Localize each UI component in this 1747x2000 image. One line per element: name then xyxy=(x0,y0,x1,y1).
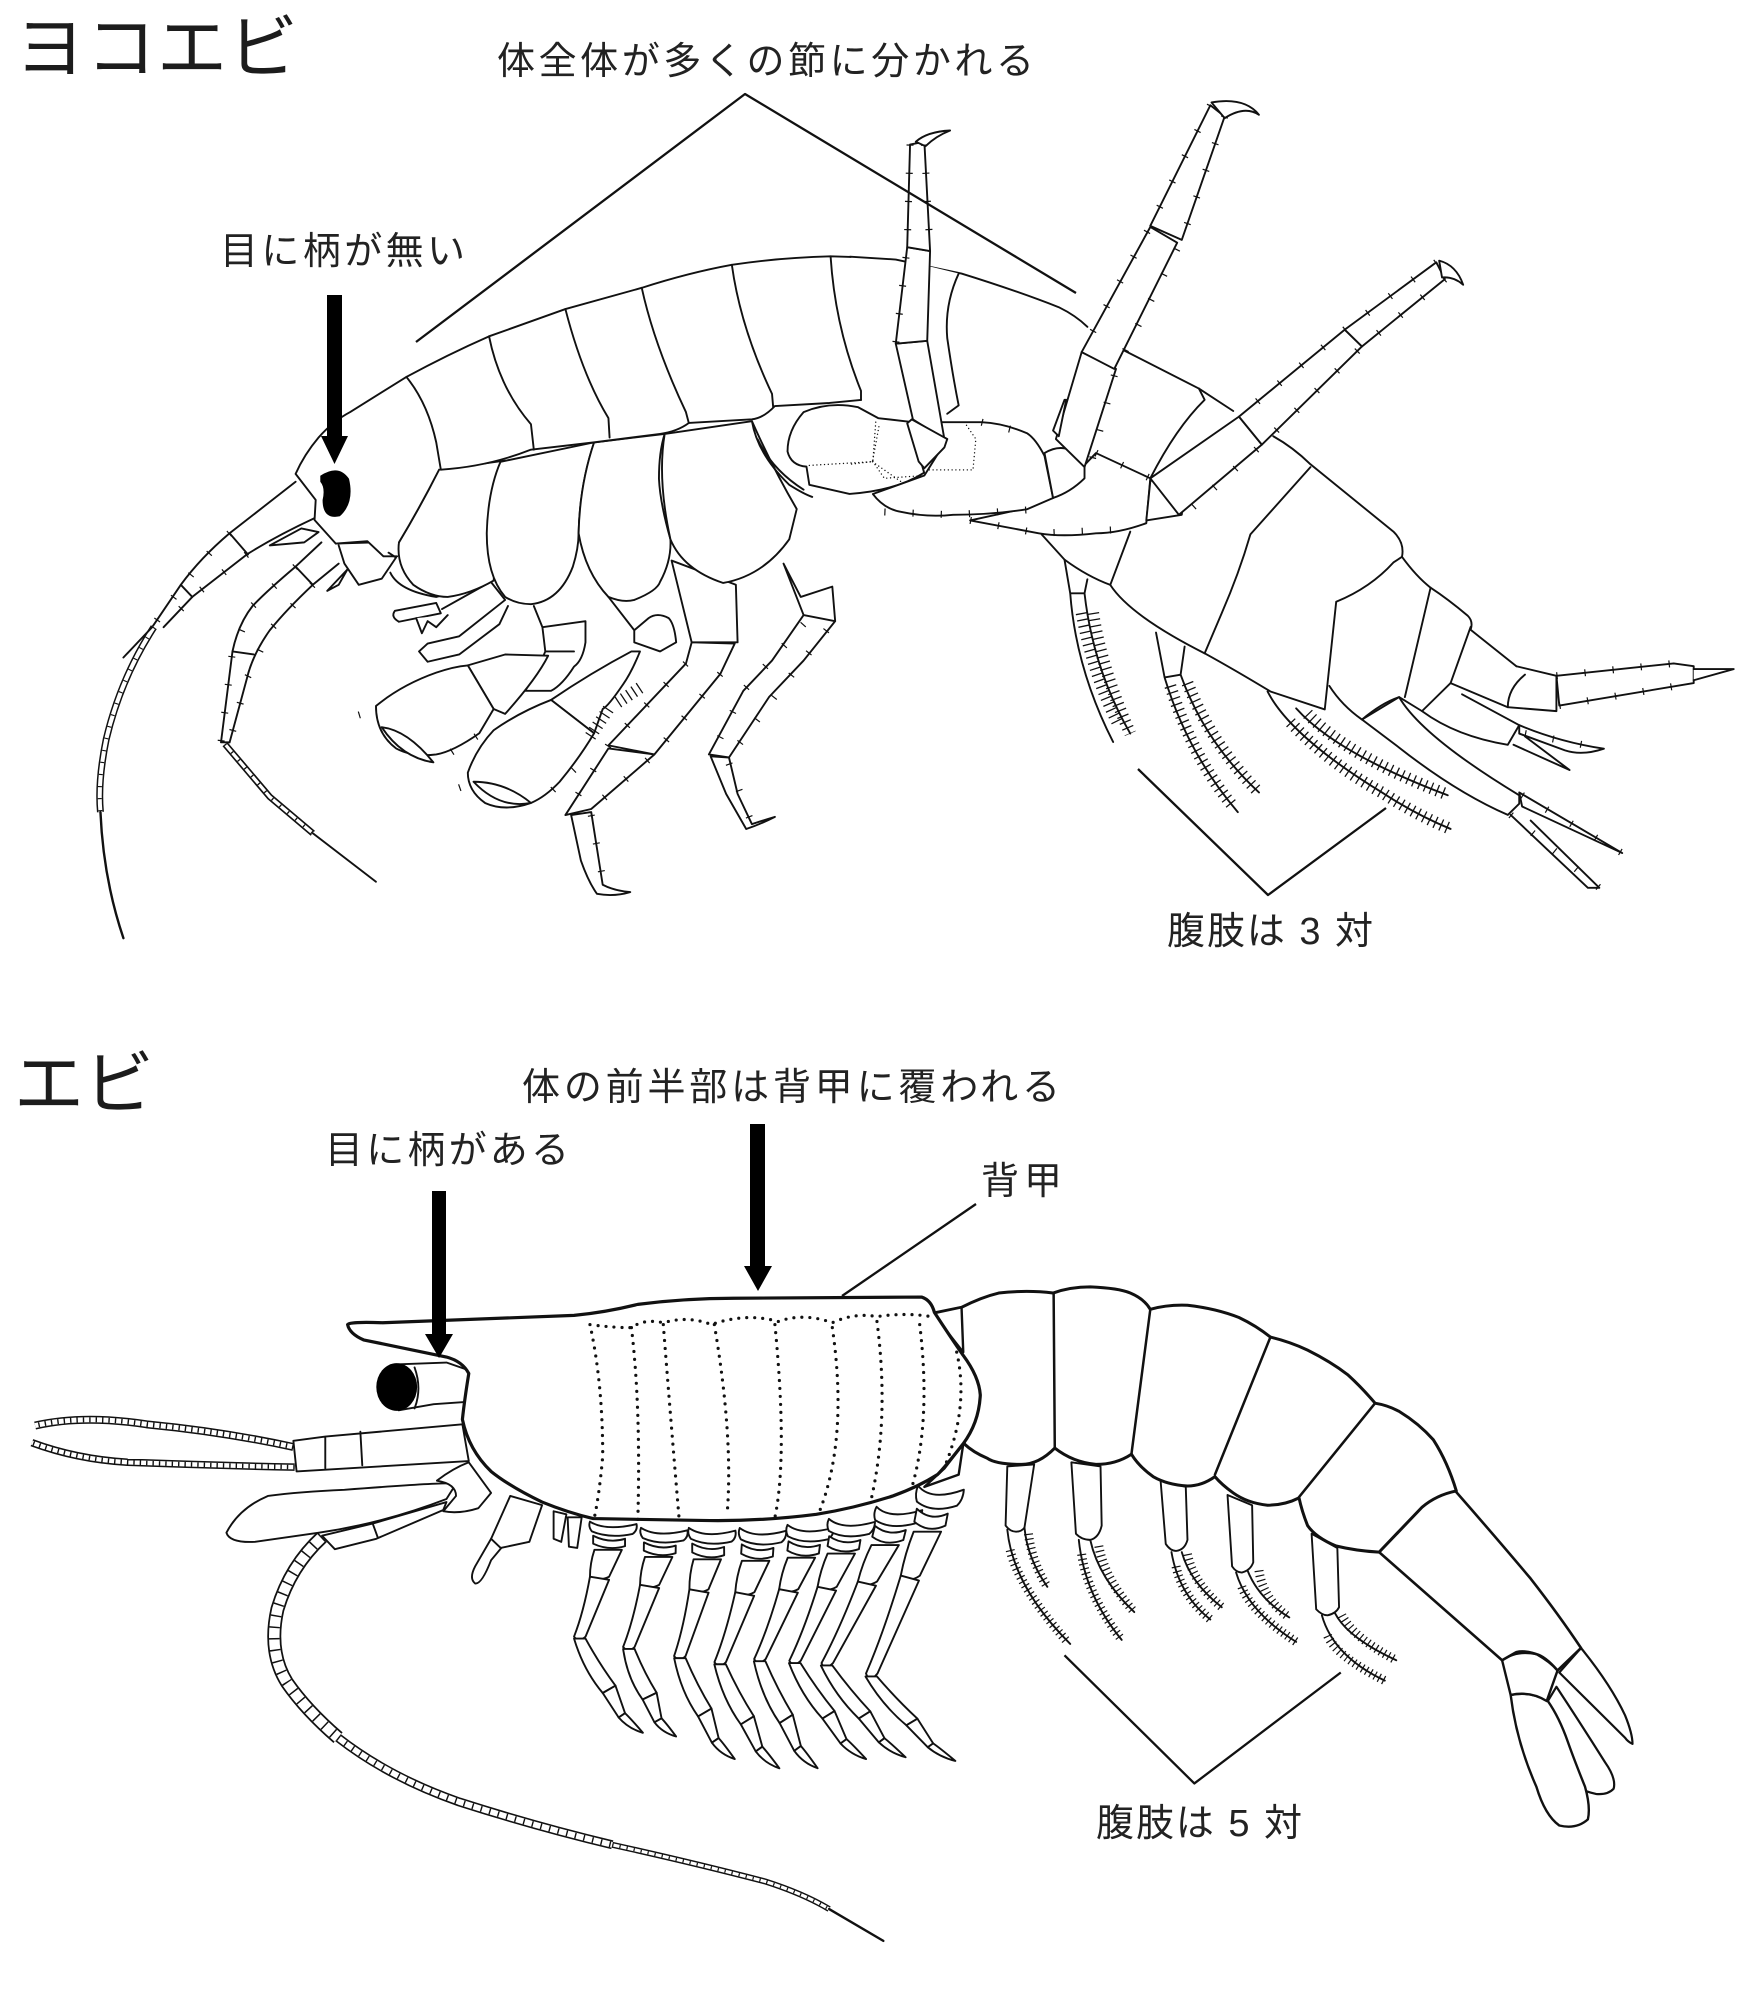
eye: black, no stalk xyxy=(320,470,351,517)
abdomen segments xyxy=(924,1287,1456,1552)
leader: carapace xyxy=(842,1204,976,1296)
title: amphipod: ヨコエビ xyxy=(15,9,298,87)
long antenna flagellum xyxy=(274,1537,883,1941)
arrow: carapace xyxy=(744,1124,772,1291)
internal segments seen through carapace xyxy=(590,1314,961,1520)
amphipod front half xyxy=(100,256,924,938)
pleopods: three pairs xyxy=(1064,560,1451,829)
pleopods: five pairs xyxy=(1006,1462,1396,1681)
third maxilliped xyxy=(472,1496,582,1584)
fifth plate and basis xyxy=(752,405,924,497)
heading: carapace covers front of body: 体の前半部は背甲に覆われる xyxy=(522,1067,1060,1109)
bracket: pleopods xyxy=(1064,1655,1341,1783)
heading: whole body divided into segments: 体全体が多くの節に分かれる xyxy=(497,41,1034,83)
illustration: amphipod xyxy=(100,94,1734,938)
rear thoracic plates xyxy=(850,265,1182,535)
amphipod rear half xyxy=(850,101,1734,888)
short antennae flagella xyxy=(32,1420,295,1467)
illustration: shrimp xyxy=(32,1204,1632,1941)
eye stalk end line xyxy=(415,1367,418,1408)
head and thorax fill xyxy=(296,256,861,556)
carapace xyxy=(348,1297,980,1521)
walking legs xyxy=(574,1486,965,1768)
tail fan xyxy=(1502,1648,1632,1827)
amphipod overview lines xyxy=(416,94,1386,895)
label: eye without stalk: 目に柄が無い xyxy=(220,231,465,273)
head and thorax outline xyxy=(296,256,861,556)
scaphocerite and antenna base xyxy=(226,1462,491,1549)
antennae xyxy=(100,482,376,938)
arrow: eye of amphipod xyxy=(321,295,348,464)
coxal plates xyxy=(399,421,797,604)
pereopods xyxy=(359,561,835,895)
telson and uropods xyxy=(1362,663,1734,888)
raised legs xyxy=(896,101,1463,515)
telson xyxy=(1379,1492,1581,1670)
arrow: eye of shrimp xyxy=(425,1191,453,1358)
mouthparts xyxy=(327,542,508,662)
label: carapace: 背甲 xyxy=(981,1161,1062,1203)
label: five pairs of pleopods: 腹肢は 5 対 xyxy=(1096,1803,1302,1845)
bracket: body segments xyxy=(416,94,1076,342)
title: shrimp: エビ xyxy=(14,1045,154,1123)
label: three pairs of pleopods: 腹肢は 3 対 xyxy=(1167,911,1373,953)
shrimp rear half xyxy=(924,1287,1632,1827)
segment dividers xyxy=(406,256,861,470)
eye stalk xyxy=(399,1363,478,1410)
antenna peduncle xyxy=(293,1424,469,1471)
label: eye with stalk: 目に柄がある xyxy=(325,1130,569,1172)
body outline and plates xyxy=(850,257,1556,745)
shrimp front half xyxy=(32,1297,980,1941)
eye: black, on stalk xyxy=(376,1363,417,1411)
bracket: pleopods xyxy=(1138,769,1386,895)
